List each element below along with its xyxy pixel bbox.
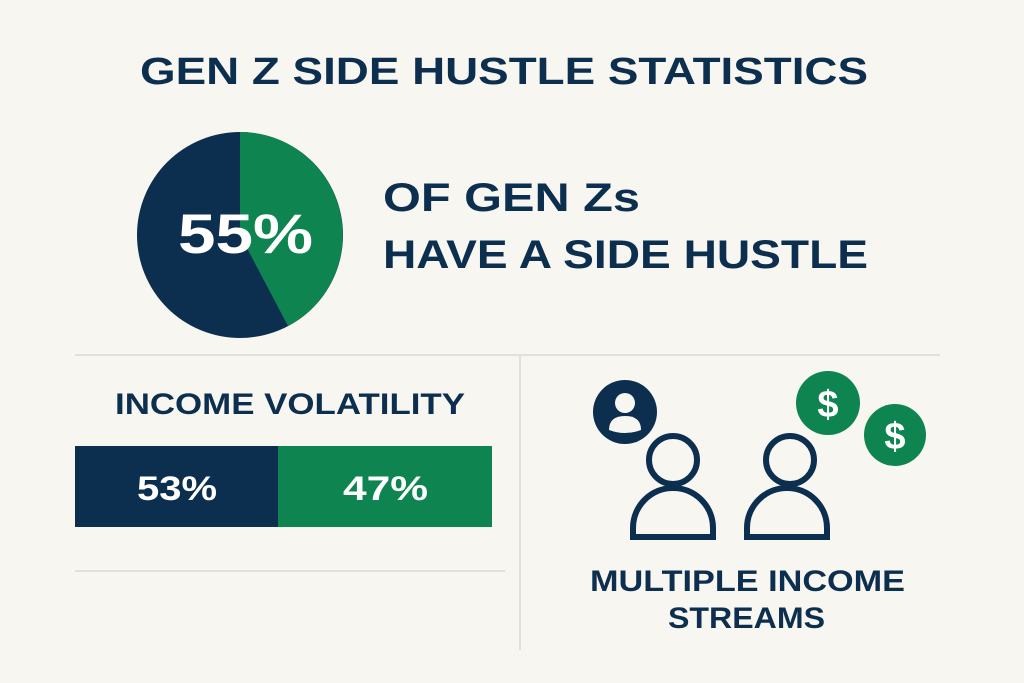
- stat text: [383, 176, 868, 277]
- label: multiple income streams: STREAMS: [668, 602, 825, 635]
- pie chart: 55%: [178, 202, 313, 265]
- label: multiple income streams: [590, 565, 905, 635]
- title: GEN Z SIDE HUSTLE STATISTICS: [140, 51, 868, 93]
- bar chart: 53%: [137, 470, 217, 508]
- icon: coins: $: [884, 416, 906, 458]
- pie chart: [137, 132, 343, 338]
- icon: coins: [796, 371, 926, 466]
- bar chart: 47%: [343, 470, 428, 508]
- label: multiple income streams: MULTIPLE INCOME: [590, 565, 905, 598]
- stat text: OF GEN Zs: [383, 176, 640, 220]
- bar chart: [75, 446, 492, 527]
- heading: income volatility: INCOME VOLATILITY: [115, 388, 465, 421]
- icon: profile badge: [593, 380, 657, 444]
- stat text: HAVE A SIDE HUSTLE: [383, 233, 868, 277]
- icon: coins: $: [817, 384, 839, 426]
- icon: two persons: [633, 436, 827, 537]
